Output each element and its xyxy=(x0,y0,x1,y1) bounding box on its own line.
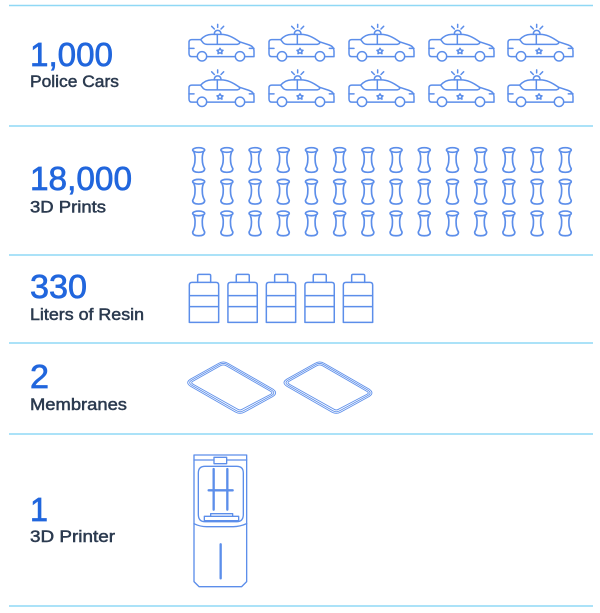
panel: membranes heading xyxy=(30,358,127,414)
icons: 3D prints xyxy=(193,148,571,236)
panel: membranes heading: Membranes xyxy=(30,396,127,414)
panel: 3D prints heading xyxy=(30,160,132,216)
panel: police cars heading: 1,000 xyxy=(30,36,113,73)
panel: resin heading: Liters of Resin xyxy=(30,306,144,324)
panel: police cars heading xyxy=(30,36,119,91)
panel: 3D prints heading: 18,000 xyxy=(30,160,132,197)
panel: police cars heading: Police Cars xyxy=(30,73,119,91)
panel: 3D printer heading: 3D Printer xyxy=(30,528,116,546)
panel: 3D printer heading: 1 xyxy=(30,491,48,528)
icons: membranes xyxy=(188,362,372,413)
panel: resin heading: 330 xyxy=(30,268,87,305)
panel: 3D printer heading xyxy=(30,491,116,546)
icon: 3D printer xyxy=(194,455,247,587)
panel: resin heading xyxy=(30,268,144,324)
icons: resin bottles xyxy=(189,274,373,322)
panel: 3D prints heading: 3D Prints xyxy=(30,198,106,216)
icons: police cars xyxy=(189,24,573,106)
panel: membranes heading: 2 xyxy=(30,358,49,395)
